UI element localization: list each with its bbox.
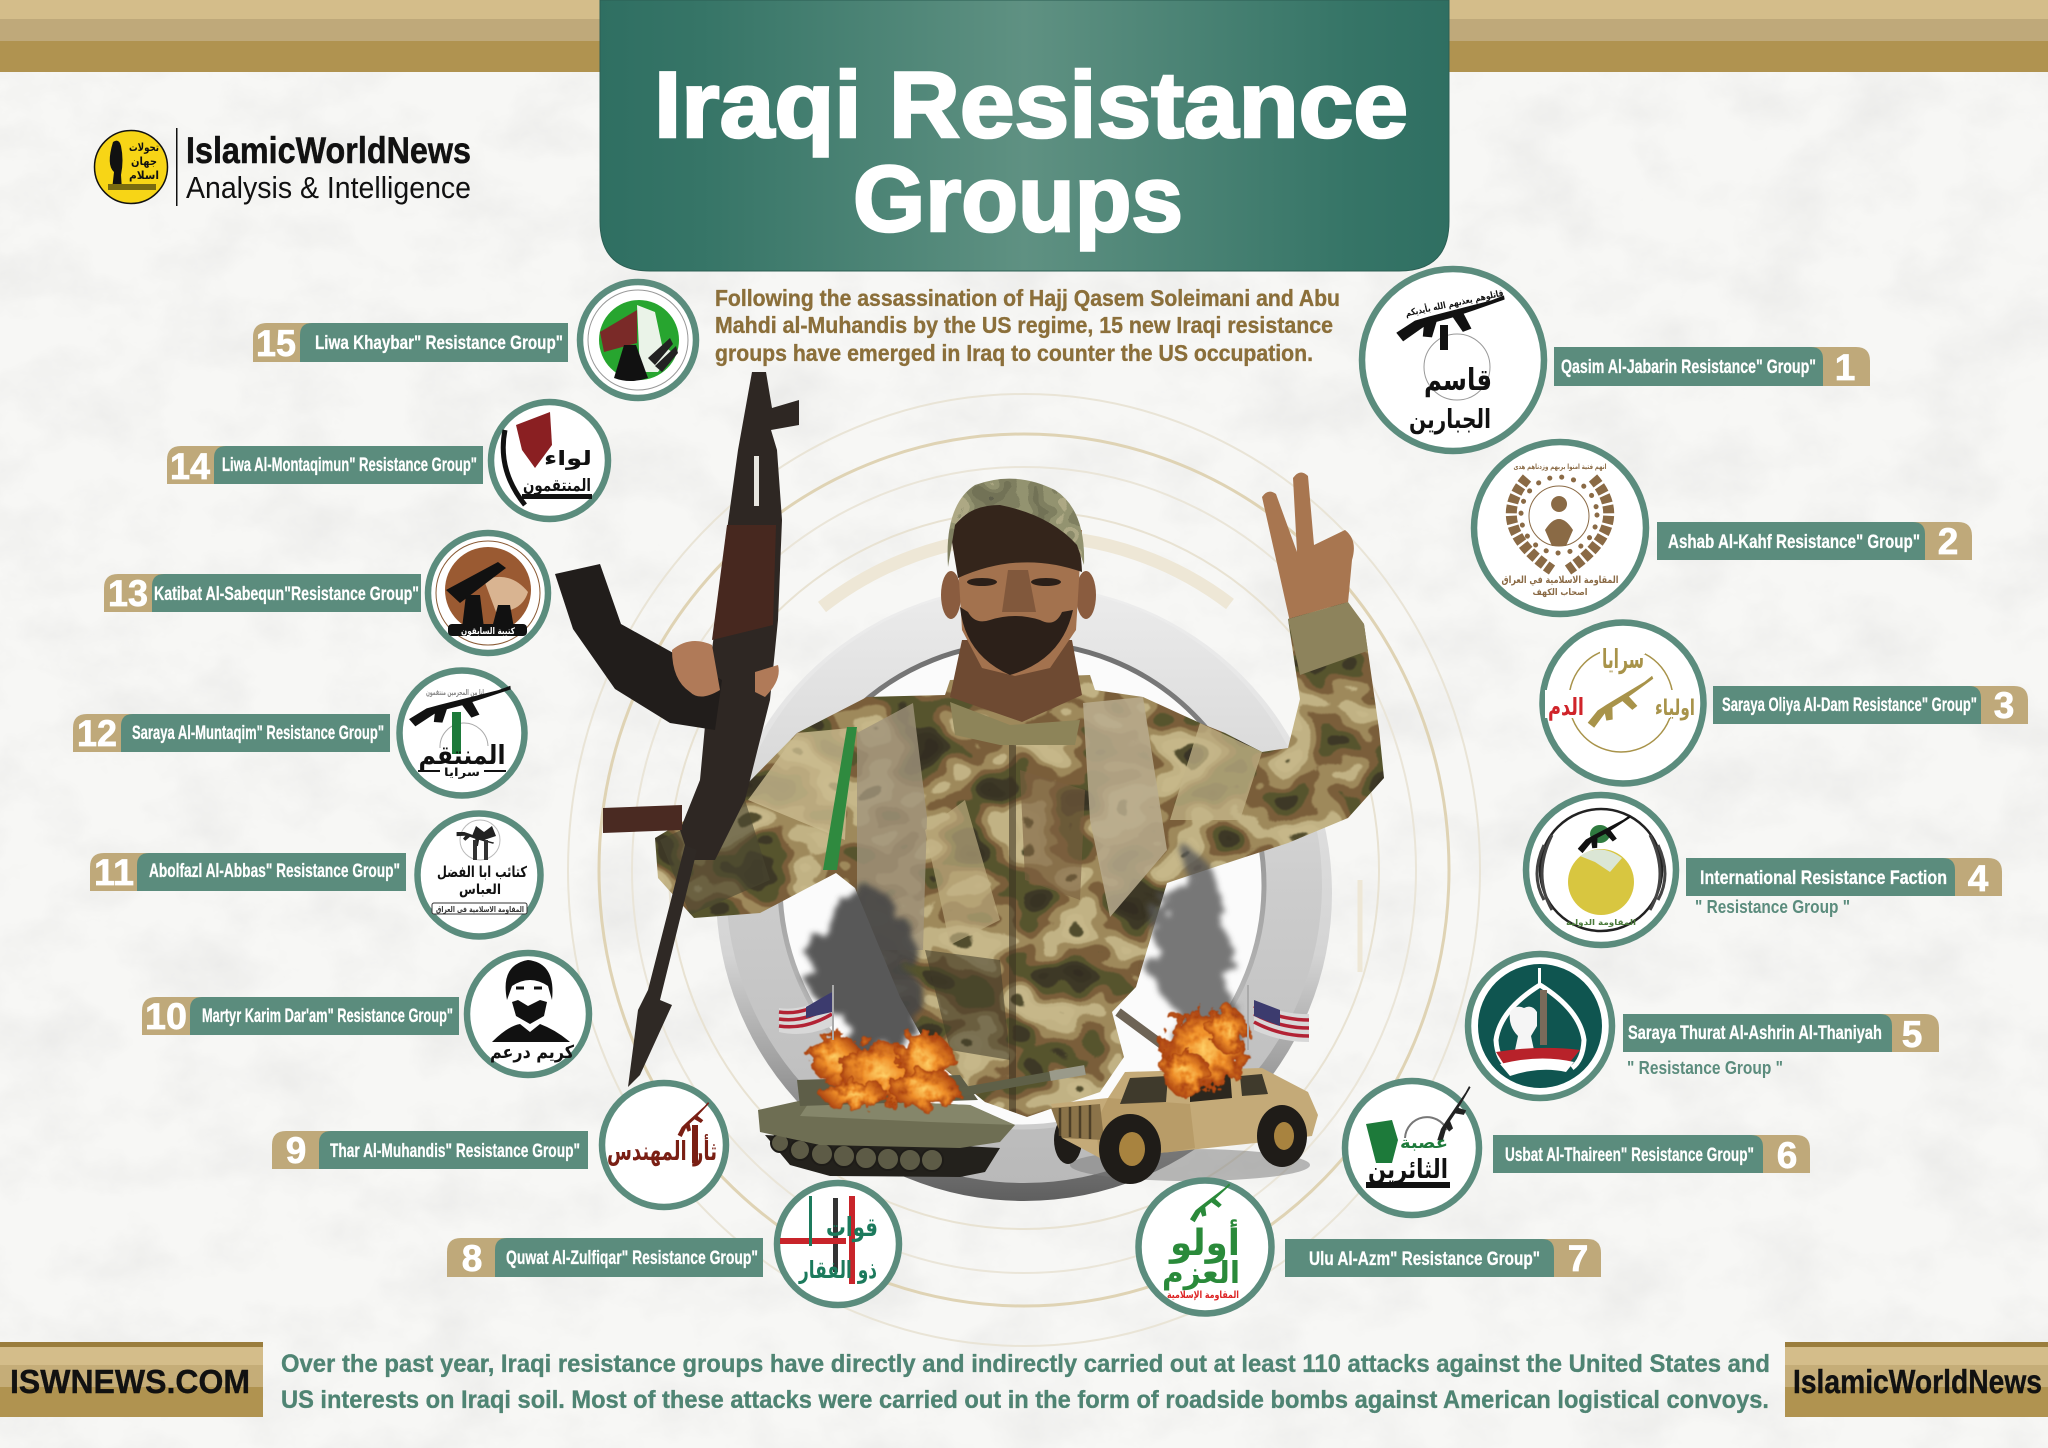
top decorative band left [0,0,600,72]
group 1: label: Qasim Al-Jabarin Resistance" Group" [1561,357,1816,378]
group 13: label: 13 [108,573,148,614]
group 1: badge [1362,269,1544,451]
group 12: badge: انا من المجرمين منتقمون [426,688,484,697]
group 14: badge: المنتقمون [523,476,591,496]
intro text: groups have emerged in Iraq to counter the US occupation. [715,340,1313,366]
group 14: badge: لواء [544,446,592,470]
group 5: label: 5 [1902,1014,1922,1055]
group 9: label: 9 [286,1130,306,1171]
group 12: label: 12 [77,713,117,754]
footer left box [0,1342,263,1417]
rifle [555,372,799,1087]
title: Iraqi Resistance [654,52,1408,157]
group 10: badge: كريم درعم [490,1042,574,1063]
logo: IslamicWorldNews: IslamicWorldNews [186,130,471,171]
group 9: badge: ثأر المهندس [607,1134,717,1167]
group 7: badge: أولو [1168,1219,1240,1264]
group 10: badge [467,953,589,1075]
group 11: badge: كتائب ابا الفضل [437,863,527,881]
flag: left American flag [779,985,834,1040]
group 12: label [73,713,390,754]
intro text: Following the assassination of Hajj Qasem Soleimani and Abu [715,285,1340,311]
footer text: US interests on Iraqi soil. Most of these attacks were carried out in the form of roadside bombs against American logistical convoys. [281,1386,1769,1414]
group 1: badge: قاتلوهم يعذبهم الله بأيديكم [1404,287,1505,319]
group 1: label [1554,347,1870,388]
group 8: badge: ذو الفقار [798,1256,877,1284]
group 13: badge: كتيبة السابقون [461,627,516,637]
top decorative band right [1449,0,2048,72]
group 13: label [104,573,421,614]
group 7: label: 7 [1568,1238,1588,1279]
portrait [492,960,570,1042]
group 10: label: 10 [145,996,187,1037]
group 4: label: 4 [1968,858,1989,899]
logo: IslamicWorldNews: جهان [131,155,157,168]
group 2: badge: اصحاب الكهف [1532,588,1588,598]
group 6: label: 6 [1777,1135,1797,1176]
rifle: stock [628,845,697,1087]
soldier: peace-sign hand [1262,472,1354,622]
group 12: label: Saraya Al-Muntaqim" Resistance Group" [132,723,384,744]
intro text: Mahdi al-Muhandis by the US regime, 15 new Iraqi resistance [715,312,1333,338]
intro text [715,285,1340,366]
group 2: badge: المقاومة الاسلامية في العراق [1502,575,1618,586]
group 11: badge [418,814,540,936]
group 6: badge: عصبة [1400,1133,1448,1152]
group 4: badge [1526,795,1676,945]
group 9: badge [602,1083,726,1207]
group 14: label: Liwa Al-Montaqimun" Resistance Group" [222,455,477,476]
footer text [281,1350,1770,1414]
group 7: badge: العزم [1162,1256,1240,1291]
group 6: badge: الثائرين [1368,1155,1448,1185]
group 11: label: 11 [94,852,134,893]
group 6: badge [1345,1081,1481,1215]
rifle: gripping hands [672,641,779,697]
group 1: label: 1 [1835,347,1855,388]
group 5: label [1623,1014,1939,1078]
logo: IslamicWorldNews: Analysis & Intelligence [186,170,471,205]
soldier: neck [950,640,1082,722]
group 5: label: Saraya Thurat Al-Ashrin Al-Thaniyah [1628,1023,1882,1044]
logo: IslamicWorldNews [94,128,471,206]
group 2: badge: انهم فتية امنوا بربهم وزدناهم هدى [1514,463,1606,471]
group 3: label [1713,685,2028,726]
group 3: badge: اولياء [1655,696,1695,721]
group 4: label: " Resistance Group " [1695,896,1850,917]
soldier: cap [948,478,1084,567]
smoke columns [810,858,1241,1070]
humvee [1051,1012,1318,1184]
group 9: label: Thar Al-Muhandis" Resistance Group" [330,1141,580,1162]
group 3: label: 3 [1994,685,2014,726]
group 5: badge [1468,954,1612,1098]
group 11: badge: المقاومة الاسلامية في العراق [436,905,524,914]
group 14: label [167,446,483,487]
group 2: label: 2 [1938,521,1958,562]
group 11: label [90,852,406,893]
title: Groups [853,146,1183,251]
central grey disc [716,585,1332,1201]
group 3: badge [1542,622,1704,784]
group 2: label [1657,521,1972,562]
soldier: beard [960,607,1073,675]
group 4: label [1686,858,2002,917]
group 11: badge: العباس [459,882,501,898]
group 6: label: Usbat Al-Thaireen" Resistance Group" [1505,1145,1754,1166]
flag: right American flag [1247,985,1309,1050]
humvee: grille [1051,1104,1104,1140]
group 1: badge: الجبارين [1409,405,1491,435]
tank: barrel [950,1070,1085,1094]
soldier: ears [941,571,1096,619]
group 3: badge: الدم [1548,693,1584,721]
group 15: label: 15 [256,323,296,364]
group 7: label [1285,1238,1601,1279]
logo: IslamicWorldNews: تحولات [129,141,159,154]
rifle: magazine [555,564,722,730]
group 3: badge: سرايا [1602,645,1644,675]
group 13: badge [428,533,548,653]
footer right box [1785,1342,2048,1417]
group 6: label [1493,1135,1810,1176]
group 8: label [447,1238,763,1279]
title panel [600,0,1449,271]
soldier: shadow under cap brim [950,495,1082,578]
group 7: badge [1138,1180,1272,1314]
group 2: badge [1474,442,1646,614]
humvee: front wheel [1099,1114,1161,1184]
humvee: gun [1118,1012,1172,1052]
group 8: badge: قوات [826,1213,878,1243]
group 15: badge [580,282,696,398]
title [654,52,1408,251]
group 7: label: Ulu Al-Azm" Resistance Group" [1309,1249,1540,1270]
group 7: badge: المقاومة الإسلامية [1167,1290,1239,1301]
group 8: label: 8 [462,1238,482,1279]
group 8: label: Quwat Al-Zulfiqar" Resistance Group" [506,1248,758,1269]
soldier: face [956,530,1082,676]
group 10: label [142,996,459,1037]
concentric rings backdrop [568,394,1480,1346]
group 1: badge: قاسم [1424,363,1492,398]
group 8: badge [777,1183,899,1305]
flames [811,1008,1248,1110]
soldier: uniform [640,590,1400,1130]
group 5: label: " Resistance Group " [1627,1057,1783,1078]
group 9: label [272,1130,588,1171]
group 4: badge: المقاومة الدولية [1566,918,1636,927]
footer left box: ISWNEWS.COM [10,1363,250,1400]
logo: IslamicWorldNews: اسلام [129,169,159,182]
group 14: label: 14 [170,446,210,487]
group 13: label: Katibat Al-Sabequn"Resistance Group" [154,584,419,605]
group 10: label: Martyr Karim Dar'am" Resistance Group" [202,1006,453,1027]
group 11: label: Abolfazl Al-Abbas" Resistance Group" [149,861,400,882]
humvee: rear wheel [1257,1105,1307,1167]
soldier [640,470,1400,1130]
group 14: badge [491,402,608,519]
group 2: label: Ashab Al-Kahf Resistance" Group" [1668,532,1920,553]
group 15: label [253,323,568,364]
group 12: badge [400,670,524,796]
group 4: label: International Resistance Faction [1700,868,1947,889]
group 12: badge: المنتقم [418,741,506,771]
group 15: label: Liwa Khaybar" Resistance Group" [315,333,563,354]
rifle: grip [603,805,682,833]
tank [758,1070,1085,1177]
footer text: Over the past year, Iraqi resistance groups have directly and indirectly carried out at least 110 attacks against the United States and [281,1350,1770,1378]
group 12: badge: سرايا [444,766,480,779]
